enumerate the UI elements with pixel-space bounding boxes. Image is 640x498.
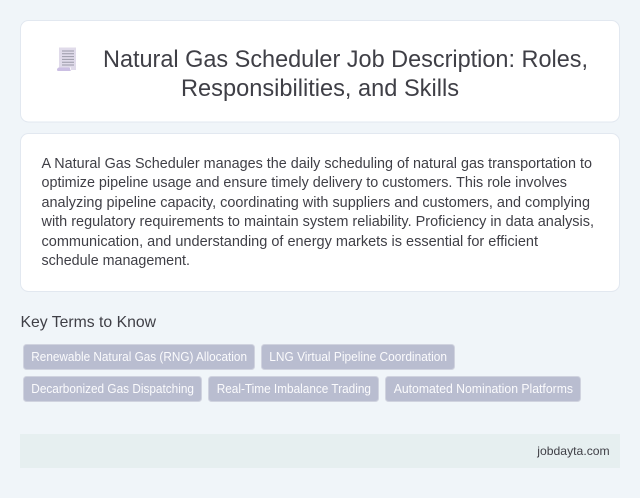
tag: real-time imbalance	[208, 376, 378, 402]
text block: description: A Natural Gas Scheduler manages the daily scheduling of natural gas transportation to	[42, 156, 592, 172]
tag: LNG virtual pipeline: LNG Virtual Pipeline Coordination	[269, 350, 447, 364]
tag: automated nomination: Automated Nomination Platforms	[394, 382, 573, 396]
tag: real-time imbalance: Real-Time Imbalance Trading	[217, 382, 371, 396]
tag: LNG virtual pipeline	[262, 344, 454, 370]
tag: renewable natural gas	[24, 344, 254, 370]
heading: title: Responsibilities, and Skills	[181, 75, 459, 102]
footer bar	[20, 434, 620, 468]
tag: renewable natural gas: Renewable Natural Gas (RNG) Allocation	[31, 350, 247, 364]
heading: key terms: Key Terms to Know	[20, 314, 156, 331]
text block: description: analyzing pipeline capacity, coordinating with suppliers and customers, and complying	[42, 195, 590, 211]
tag: decarbonized gas	[24, 376, 202, 402]
text block: description	[40, 156, 594, 269]
text block: description: communication, and understanding of energy markets is essential for efficient	[42, 234, 538, 250]
heading: title: Natural Gas Scheduler Job Description: Roles,	[103, 46, 588, 73]
icon: document scroll	[57, 48, 76, 71]
text block: description: optimize pipeline usage and ensure timely delivery to customers. This role involves	[42, 175, 567, 191]
text block: description: schedule management.	[42, 253, 190, 269]
panel: description card	[20, 134, 620, 292]
footer bar: jobdayta.com	[536, 444, 610, 458]
tag: automated nomination	[386, 376, 580, 402]
tag: decarbonized gas: Decarbonized Gas Dispatching	[31, 382, 194, 396]
panel: title card	[20, 20, 620, 122]
text block: description: with regulatory requirements to maintain system reliability. Proficiency in data analysis,	[40, 214, 594, 230]
heading: title	[103, 46, 588, 102]
